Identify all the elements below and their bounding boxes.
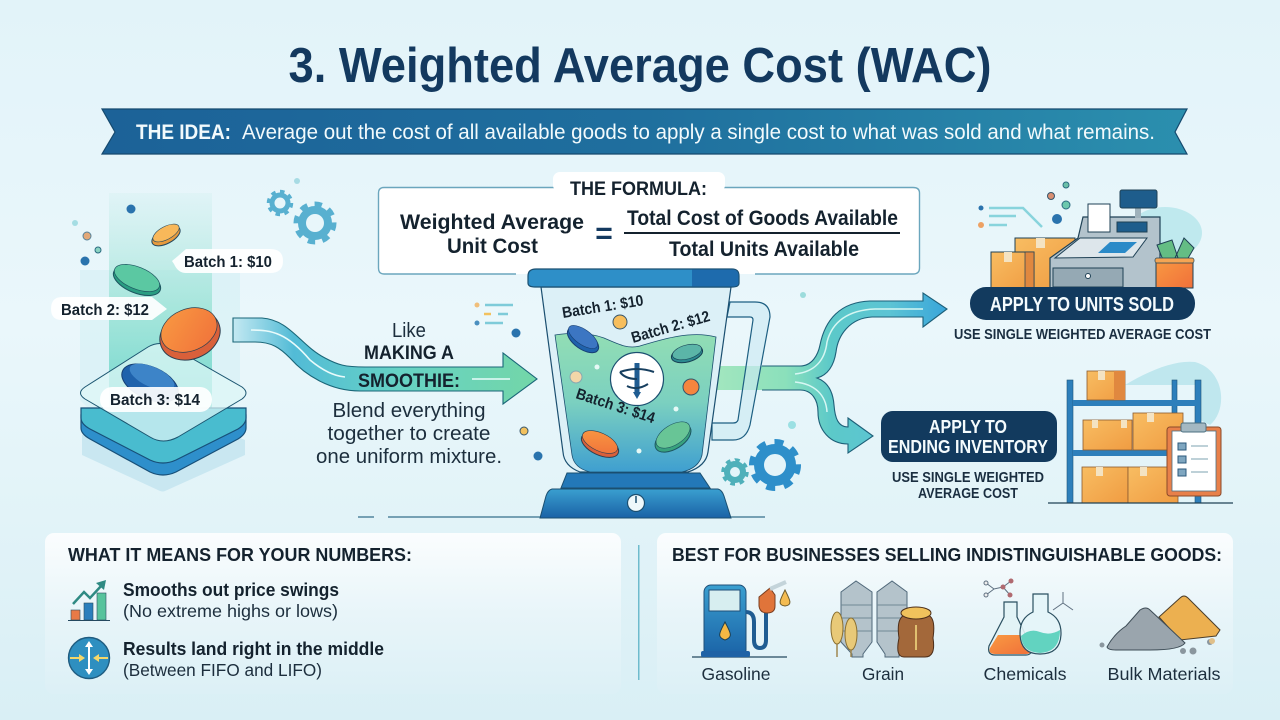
smoothie analogy text: together to create bbox=[328, 423, 490, 445]
lid bbox=[528, 269, 739, 287]
heading: WHAT IT MEANS FOR YOUR NUMBERS: bbox=[68, 544, 412, 565]
text: smooths out: Smooths out price swings bbox=[123, 580, 339, 600]
label: bulk materials: Bulk Materials bbox=[1108, 664, 1221, 684]
formula panel: THE FORMULA: bbox=[570, 178, 707, 200]
banner: the idea bbox=[102, 109, 1187, 154]
caption: units sold: USE SINGLE WEIGHTED AVERAGE COST bbox=[954, 326, 1211, 343]
icon: middle bbox=[68, 638, 110, 678]
coin: green bbox=[109, 259, 165, 301]
platform bbox=[81, 415, 246, 475]
boxes bbox=[1015, 238, 1075, 288]
smoothie analogy text: one uniform mixture. bbox=[316, 446, 502, 468]
label: batch 1: Batch 1: $10 bbox=[184, 254, 272, 271]
caption: ending inventory: AVERAGE COST bbox=[918, 485, 1018, 502]
smoothie analogy text: MAKING A bbox=[364, 343, 454, 364]
formula panel: Total Cost of Goods Available bbox=[627, 206, 898, 230]
coin: blue bbox=[116, 356, 184, 410]
formula panel bbox=[378, 172, 920, 274]
label: apply to units sold: APPLY TO UNITS SOLD bbox=[990, 294, 1174, 316]
panel: what it means for your numbers: (No extreme highs or lows) bbox=[123, 601, 338, 621]
label: apply to ending inventory bbox=[881, 411, 1057, 462]
label: apply to units sold bbox=[970, 287, 1195, 320]
dots bbox=[1063, 182, 1069, 188]
jar labels: Batch 1: $10 bbox=[561, 292, 645, 322]
coin: orange bbox=[578, 426, 622, 463]
label: batch 2 bbox=[51, 297, 167, 320]
blender: Batch 3: $14 bbox=[574, 386, 657, 427]
platform shadow bbox=[82, 400, 245, 492]
label: grain: Grain bbox=[862, 664, 904, 684]
label: batch 3: Batch 3: $14 bbox=[110, 392, 200, 409]
caption: ending inventory bbox=[892, 469, 1044, 502]
formula panel: Unit Cost bbox=[447, 234, 538, 258]
label: batch 2: Batch 2: $12 bbox=[61, 302, 149, 319]
label: gasoline: Gasoline bbox=[702, 664, 770, 684]
cash pot bbox=[1157, 238, 1194, 260]
formula panel: Total Units Available bbox=[669, 237, 859, 261]
smoothie analogy text: Like bbox=[392, 320, 426, 342]
light beam bbox=[80, 270, 240, 420]
left illustration: coins falling onto a platform bbox=[51, 193, 283, 492]
smoothie analogy text: SMOOTHIE: bbox=[358, 371, 460, 392]
coin: green bbox=[650, 416, 696, 458]
banner: the idea: Average out the cost of all available goods to apply a single cost to what was sold and what remains. bbox=[242, 120, 1155, 144]
heading: BEST FOR BUSINESSES SELLING INDISTINGUISHABLE GOODS: bbox=[672, 544, 1222, 565]
register illustration bbox=[978, 182, 1202, 288]
register body bbox=[1050, 217, 1160, 288]
jar bbox=[541, 287, 731, 472]
coin: teal bbox=[669, 341, 705, 366]
label: apply to ending inventory: APPLY TO bbox=[929, 417, 1007, 437]
blender bbox=[528, 269, 770, 518]
panel: what it means for your numbers bbox=[45, 533, 621, 694]
smoothie analogy text bbox=[316, 320, 502, 468]
shelving illustration bbox=[1048, 362, 1233, 503]
panel: what it means for your numbers: (Between FIFO and LIFO) bbox=[123, 660, 322, 680]
icon: chemicals bbox=[984, 578, 1073, 655]
formula panel: = bbox=[595, 217, 613, 250]
coin: orange bbox=[152, 300, 228, 369]
label: apply to ending inventory: ENDING INVENTORY bbox=[888, 437, 1048, 457]
gears, lower right of blender bbox=[723, 442, 798, 488]
small gears, top bbox=[268, 178, 334, 242]
icon: bulk materials bbox=[1100, 596, 1220, 654]
icon: gasoline pump bbox=[692, 582, 790, 657]
text: results land: Results land right in the middle bbox=[123, 639, 384, 659]
caption: ending inventory: USE SINGLE WEIGHTED bbox=[892, 469, 1044, 486]
banner: the idea: THE IDEA: bbox=[136, 121, 231, 144]
bubbles bbox=[613, 315, 627, 329]
handle bbox=[712, 302, 770, 440]
icon: grain bbox=[831, 581, 934, 657]
split arrows out of blender bbox=[716, 293, 947, 453]
blender: Batch 2: $12 bbox=[629, 308, 712, 347]
label: batch 1 bbox=[172, 249, 283, 273]
flow arrow to blender bbox=[233, 318, 537, 404]
coin: blue bbox=[563, 321, 603, 358]
blade hub bbox=[610, 352, 664, 406]
coin: gold bbox=[149, 220, 183, 250]
label: chemicals: Chemicals bbox=[984, 664, 1067, 684]
liquid bbox=[555, 333, 716, 472]
smoothie analogy text: Blend everything bbox=[332, 400, 486, 422]
title: 3. Weighted Average Cost (WAC) bbox=[288, 39, 992, 93]
base bbox=[561, 473, 710, 488]
icon: rising bars bbox=[68, 580, 110, 620]
clipboard bbox=[1167, 427, 1221, 496]
panel: best for businesses bbox=[657, 533, 1233, 694]
formula panel: Weighted Average bbox=[400, 210, 584, 234]
decorations around blender bbox=[358, 292, 806, 517]
label: batch 3 bbox=[100, 387, 212, 412]
decorative dots bbox=[126, 204, 136, 214]
